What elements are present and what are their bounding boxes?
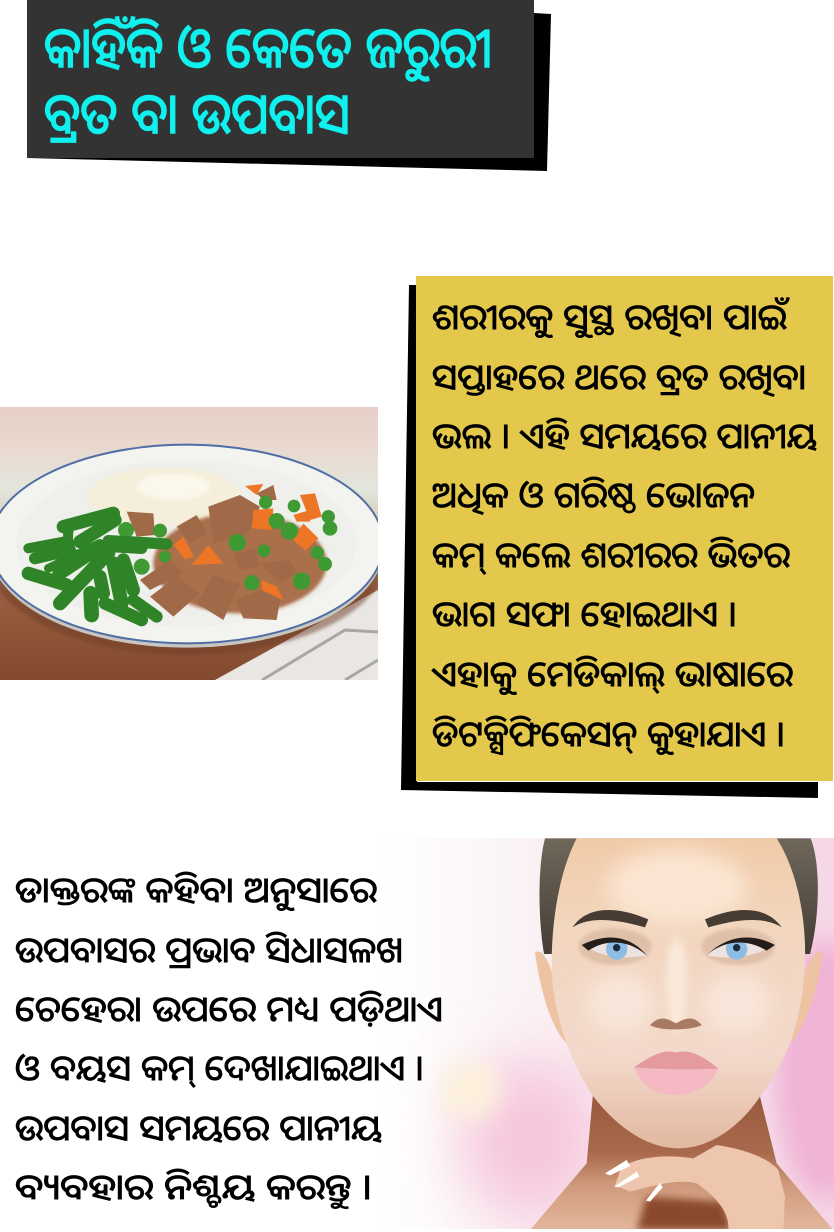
title banner [27,0,551,171]
napkin and fork [215,590,378,680]
mashed potato [88,467,242,526]
stew [118,484,337,620]
yellow text panel [401,276,833,798]
photo: woman's face [380,838,834,1230]
green beans [28,513,167,620]
eyebrows [573,910,782,927]
plate [0,445,387,655]
lower text block: ଚେହେରା ଉପରେ ମଧ୍ୟ ପଡ଼ିଥାଏ [15,990,443,1029]
panel text: ଅଧିକ ଓ ଗରିଷ୍ଠ ଭୋଜନ [432,476,755,515]
panel text: କମ୍ କଲେ ଶରୀରର ଭିତର [432,536,790,575]
lower text block: ଓ ବୟସ କମ୍ ଦେଖାଯାଇଥାଏ । [15,1049,424,1088]
lower text block [15,871,443,1209]
panel text: ଭାଗ ସଫା ହୋଇଥାଏ । [432,595,737,634]
title text: କାହିଁକି ଓ କେତେ ଜରୁରୀ [44,16,492,81]
panel text: ଏହାକୁ ମେଡିକାଲ୍ ଭାଷାରେ [431,655,793,695]
panel text [431,297,817,755]
title text: ବ୍ରତ ବା ଉପବାସ [44,82,350,145]
hair [539,838,818,954]
ears [535,951,823,1044]
lower text block: ଉପବାସ ସମୟରେ ପାନୀୟ [15,1109,382,1148]
lower text block: ବ୍ୟବହାର ନିଶ୍ଚୟ କରନ୍ତୁ । [15,1168,372,1209]
photo: plate of food [0,407,387,680]
panel text: ଡିଟକ୍ସିଫିକେସନ୍ କୁହାଯାଏ । [432,715,785,755]
eyes [578,928,775,965]
lower text block: ଡାକ୍ତରଙ୍କ କହିବା ଅନୁସାରେ [15,871,377,911]
nose [650,1019,702,1029]
hand [605,1145,785,1230]
lower text block: ଉପବାସର ପ୍ରଭାବ ସିଧାସଳଖ [15,931,403,970]
neck [530,1090,833,1230]
chest shadow [637,1197,732,1230]
panel text: ସପ୍ତାହରେ ଥରେ ବ୍ରତ ରଖିବା [432,358,806,397]
lips [634,1051,719,1095]
panel text: ଭଲ । ଏହି ସମୟରେ ପାନୀୟ [432,417,817,456]
title text [44,16,492,145]
face [552,838,805,1148]
panel text: ଶରୀରକୁ ସୁସ୍ଥ ରଖିବା ପାଇଁ [432,297,789,338]
